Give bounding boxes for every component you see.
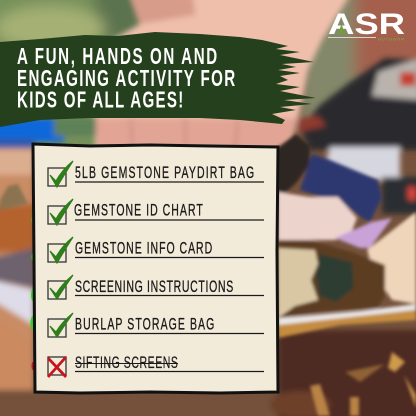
checklist item: burlap storage bag: BURLAP STORAGE BAG: [75, 314, 214, 333]
checklist item: gemstone info card: GEMSTONE INFO CARD: [75, 238, 212, 257]
checklist item: screening instructions: SCREENING INSTRUCTIONS: [75, 276, 233, 296]
heading text: ENGAGING ACTIVITY FOR: [17, 67, 235, 92]
heading text: [17, 45, 235, 113]
checklist item: gemstone id chart: GEMSTONE ID CHART: [74, 200, 203, 219]
checklist item: sifting screens (crossed out): SIFTING SCREENS: [75, 352, 178, 372]
checklist item: burlap storage bag: [48, 313, 264, 337]
checklist item: 5lb gemstone paydirt bag: [48, 161, 264, 187]
panel: checklist card: [33, 144, 278, 393]
checklist item: screening instructions: [48, 275, 264, 299]
check marks peeking out behind the card: [30, 216, 36, 370]
logo: ASR Outdoor: OUTDOOR: [378, 36, 404, 42]
heading text: KIDS OF ALL AGES!: [17, 89, 183, 113]
heading banner: green brush stroke: [0, 32, 316, 127]
checklist item: 5lb gemstone paydirt bag: 5LB GEMSTONE PAYDIRT BAG: [75, 162, 254, 182]
heading text: A FUN, HANDS ON AND: [17, 45, 217, 70]
checklist item: gemstone id chart: [48, 199, 264, 225]
logo: ASR Outdoor: ASR: [328, 8, 405, 41]
checklist item: sifting screens (crossed out): [48, 352, 264, 377]
checklist item: gemstone info card: [48, 237, 264, 263]
